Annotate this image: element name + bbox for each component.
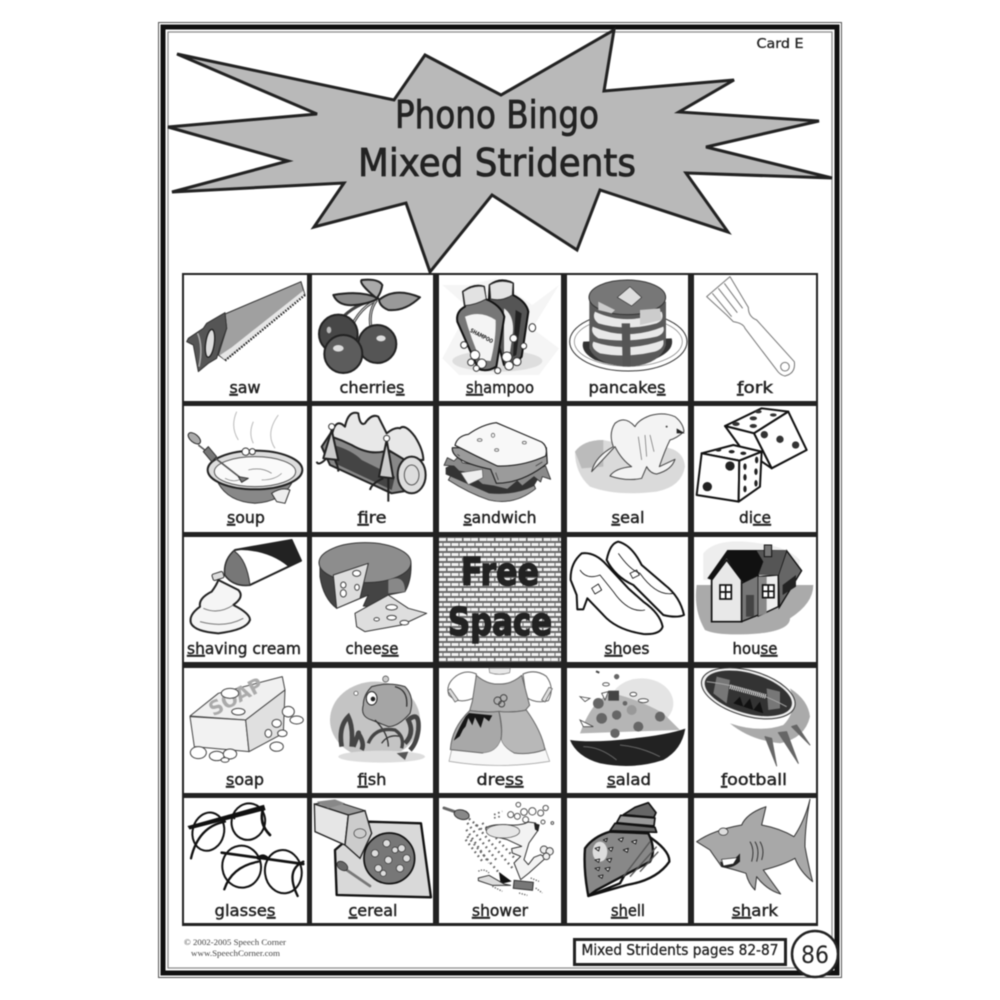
cell: house: [694, 537, 816, 662]
icon: soap: SOAP: [204, 672, 267, 721]
label: dice: dice: [739, 508, 771, 527]
icon: dress: [448, 668, 552, 765]
cell: shaving cream: [184, 537, 307, 662]
cell: soup: [184, 406, 307, 532]
bingo grid: [182, 273, 818, 926]
icon: fire: [317, 413, 426, 502]
icon: football: [696, 658, 810, 766]
cell: cereal: [312, 798, 433, 923]
label: fork: fork: [737, 378, 774, 397]
label: dress: dress: [476, 770, 524, 789]
icon: shell: [585, 803, 669, 896]
icon: cheese: [319, 543, 427, 632]
icon: shower: [444, 802, 554, 895]
cell: shower: [439, 798, 561, 923]
label: glasses: glasses: [214, 901, 276, 920]
label: cereal: cereal: [348, 901, 398, 920]
label: salad: salad: [607, 770, 651, 789]
free space text: [448, 550, 552, 644]
label: cheese: cheese: [346, 639, 398, 658]
label: saw: saw: [230, 378, 260, 397]
icon: shoes: [571, 542, 684, 634]
label: cherries: cherries: [340, 378, 404, 397]
copyright note: [184, 937, 286, 958]
icon: pancakes: [570, 280, 687, 371]
cell: fire: [312, 406, 433, 532]
copyright note: www.SpeechCorner.com: [191, 948, 280, 958]
cell: free space: [439, 537, 561, 662]
icon: cereal: [314, 799, 431, 897]
label: shoes: shoes: [604, 639, 650, 658]
label: soup: soup: [227, 508, 265, 527]
cell: seal: [567, 406, 688, 532]
page number: [792, 931, 838, 977]
starburst title banner: [168, 30, 832, 272]
icon: shark: [697, 799, 813, 894]
label: pancakes: pancakes: [588, 378, 666, 397]
cell: cherries: [312, 275, 433, 401]
icon: salad: [570, 671, 685, 766]
cell: shampoo: [439, 275, 561, 401]
label: shark: shark: [732, 901, 779, 920]
label: shell: shell: [611, 901, 645, 920]
label: shaving cream: shaving cream: [187, 639, 301, 658]
cell: football: [694, 658, 816, 793]
cell: soap: [184, 668, 307, 793]
label: fish: fish: [358, 770, 386, 789]
cell: shell: [567, 798, 688, 923]
cell: fish: [312, 668, 433, 793]
copyright note: © 2002-2005 Speech Corner: [184, 937, 286, 947]
label: shampoo: shampoo: [466, 378, 534, 397]
icon: soup: [186, 412, 302, 503]
icon: shaving cream: [191, 540, 301, 633]
icon: glasses: [188, 800, 304, 896]
icon: house: [696, 541, 813, 634]
cell: glasses: [184, 798, 307, 923]
cell: salad: [567, 668, 688, 793]
cell: sandwich: [439, 406, 561, 532]
icon: fork: [707, 277, 795, 376]
card label: Card E: [756, 37, 804, 52]
free space text: Free: [461, 550, 539, 594]
cell: shark: [694, 798, 816, 923]
label: soap: soap: [226, 770, 264, 789]
free space text: Space: [448, 600, 552, 644]
icon: saw: [187, 282, 305, 372]
cell: shoes: [567, 537, 688, 662]
icon: fish: [330, 676, 425, 763]
title: Mixed Stridents: [358, 141, 636, 185]
title: Phono Bingo: [395, 93, 599, 137]
icon: sandwich: [444, 423, 551, 502]
label: fire: fire: [358, 508, 386, 527]
icon: cherries: [319, 280, 420, 373]
page reference box: Mixed Stridents pages 82-87: [582, 941, 778, 959]
label: house: house: [732, 639, 778, 658]
icon: shampoo: SHAMPOO: [469, 328, 494, 345]
label: shower: shower: [472, 901, 528, 920]
label: football: football: [721, 770, 787, 789]
cell: fork: [694, 275, 816, 401]
cell: dice: [694, 406, 816, 532]
cell: saw: [184, 275, 307, 401]
label: seal: seal: [612, 508, 644, 527]
cell: pancakes: [567, 275, 688, 401]
label: sandwich: sandwich: [464, 508, 536, 527]
title: [358, 93, 636, 185]
icon: seal: [575, 414, 685, 493]
cell: dress: [439, 668, 561, 793]
page number: 86: [801, 941, 829, 969]
icon: dice: [697, 408, 807, 502]
cell: cheese: [312, 537, 433, 662]
page reference box: [574, 940, 786, 964]
page frame: [158, 22, 842, 978]
